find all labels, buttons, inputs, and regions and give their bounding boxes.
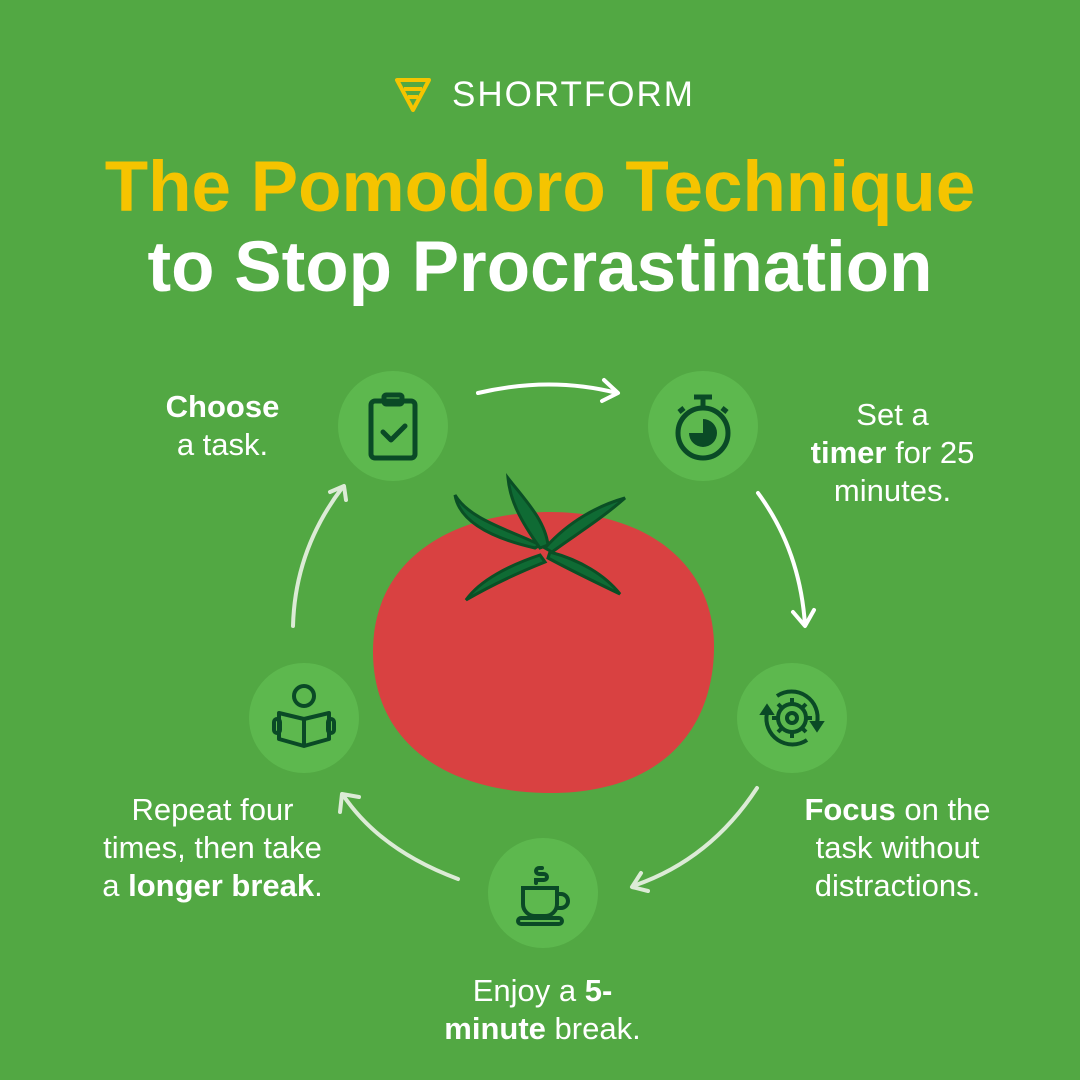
label: break: minute break. xyxy=(444,1011,641,1046)
label: choose: Choose xyxy=(166,389,279,424)
arrow: timer to focus xyxy=(758,493,814,626)
title: The Pomodoro Technique xyxy=(105,148,975,227)
step circle: clipboard xyxy=(338,371,448,481)
label: timer: minutes. xyxy=(834,473,951,508)
label: break xyxy=(444,973,641,1046)
label: repeat: times, then take xyxy=(103,830,322,865)
label: focus: task without xyxy=(816,830,979,865)
arrow: repeat to choose xyxy=(293,486,346,626)
arrow: choose to timer xyxy=(478,380,618,401)
title: to Stop Procrastination xyxy=(148,228,932,307)
arrow: focus to break xyxy=(632,788,757,891)
logo xyxy=(395,75,695,114)
label: choose: a task. xyxy=(177,427,268,462)
label: repeat: Repeat four xyxy=(132,792,294,827)
step circle: coffee xyxy=(488,838,598,948)
label: timer: Set a xyxy=(856,397,929,432)
tomato leaves xyxy=(455,478,625,600)
arrow: break to repeat xyxy=(340,794,458,879)
label: repeat: a longer break. xyxy=(102,868,323,903)
step circle: reader xyxy=(249,663,359,773)
label: choose xyxy=(166,389,279,462)
label: timer xyxy=(811,397,974,508)
icon: logo mark xyxy=(395,78,431,112)
step circle: timer xyxy=(648,371,758,481)
label: focus: distractions. xyxy=(815,868,980,903)
step circle: gear xyxy=(737,663,847,773)
label: timer: timer for 25 xyxy=(811,435,974,470)
label: break: Enjoy a 5- xyxy=(473,973,612,1008)
tomato xyxy=(373,473,714,793)
title xyxy=(105,148,975,307)
logo text: SHORTFORM xyxy=(452,75,695,114)
label: focus xyxy=(804,792,991,903)
label: focus: Focus on the xyxy=(804,792,991,827)
label: repeat xyxy=(102,792,323,903)
